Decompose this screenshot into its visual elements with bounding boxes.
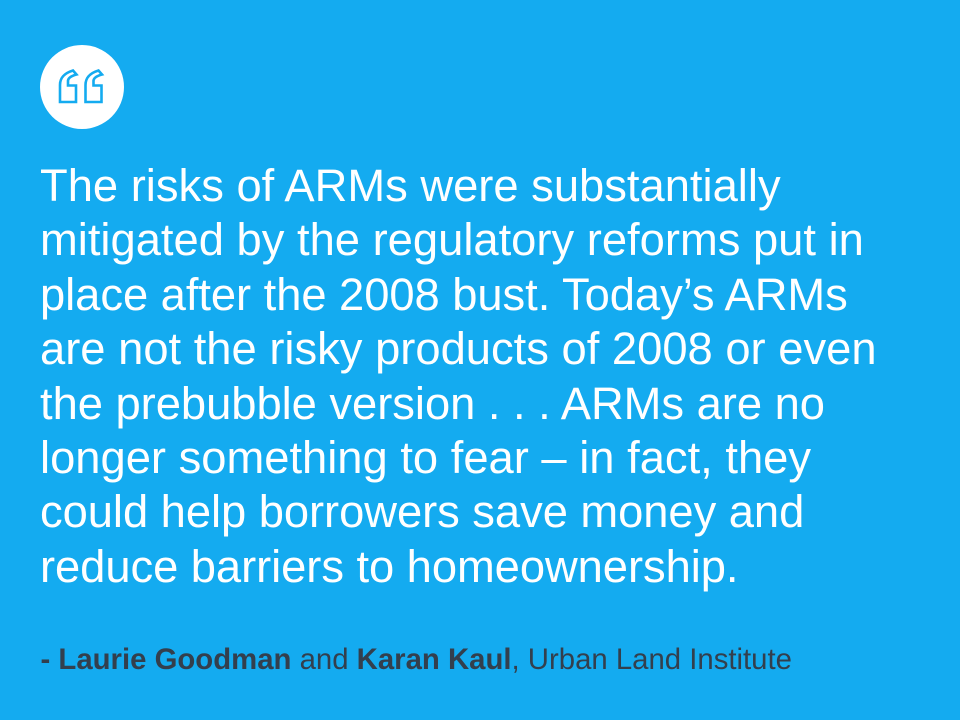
quote text: reduce barriers to homeownership. xyxy=(40,541,738,592)
quote text: could help borrowers save money and xyxy=(40,486,804,537)
attribution: - Laurie Goodman and Karan Kaul, Urban Land Institute xyxy=(40,643,792,676)
quote text: place after the 2008 bust. Today’s ARMs xyxy=(40,269,848,320)
quote text: The risks of ARMs were substantially xyxy=(40,160,781,211)
icon: quotation mark badge xyxy=(40,45,124,129)
quote text xyxy=(40,160,877,592)
quote text: the prebubble version . . . ARMs are no xyxy=(40,378,825,429)
quote text: are not the risky products of 2008 or even xyxy=(40,323,877,374)
quote text: mitigated by the regulatory reforms put in xyxy=(40,214,864,265)
quote text: longer something to fear – in fact, they xyxy=(40,432,811,483)
